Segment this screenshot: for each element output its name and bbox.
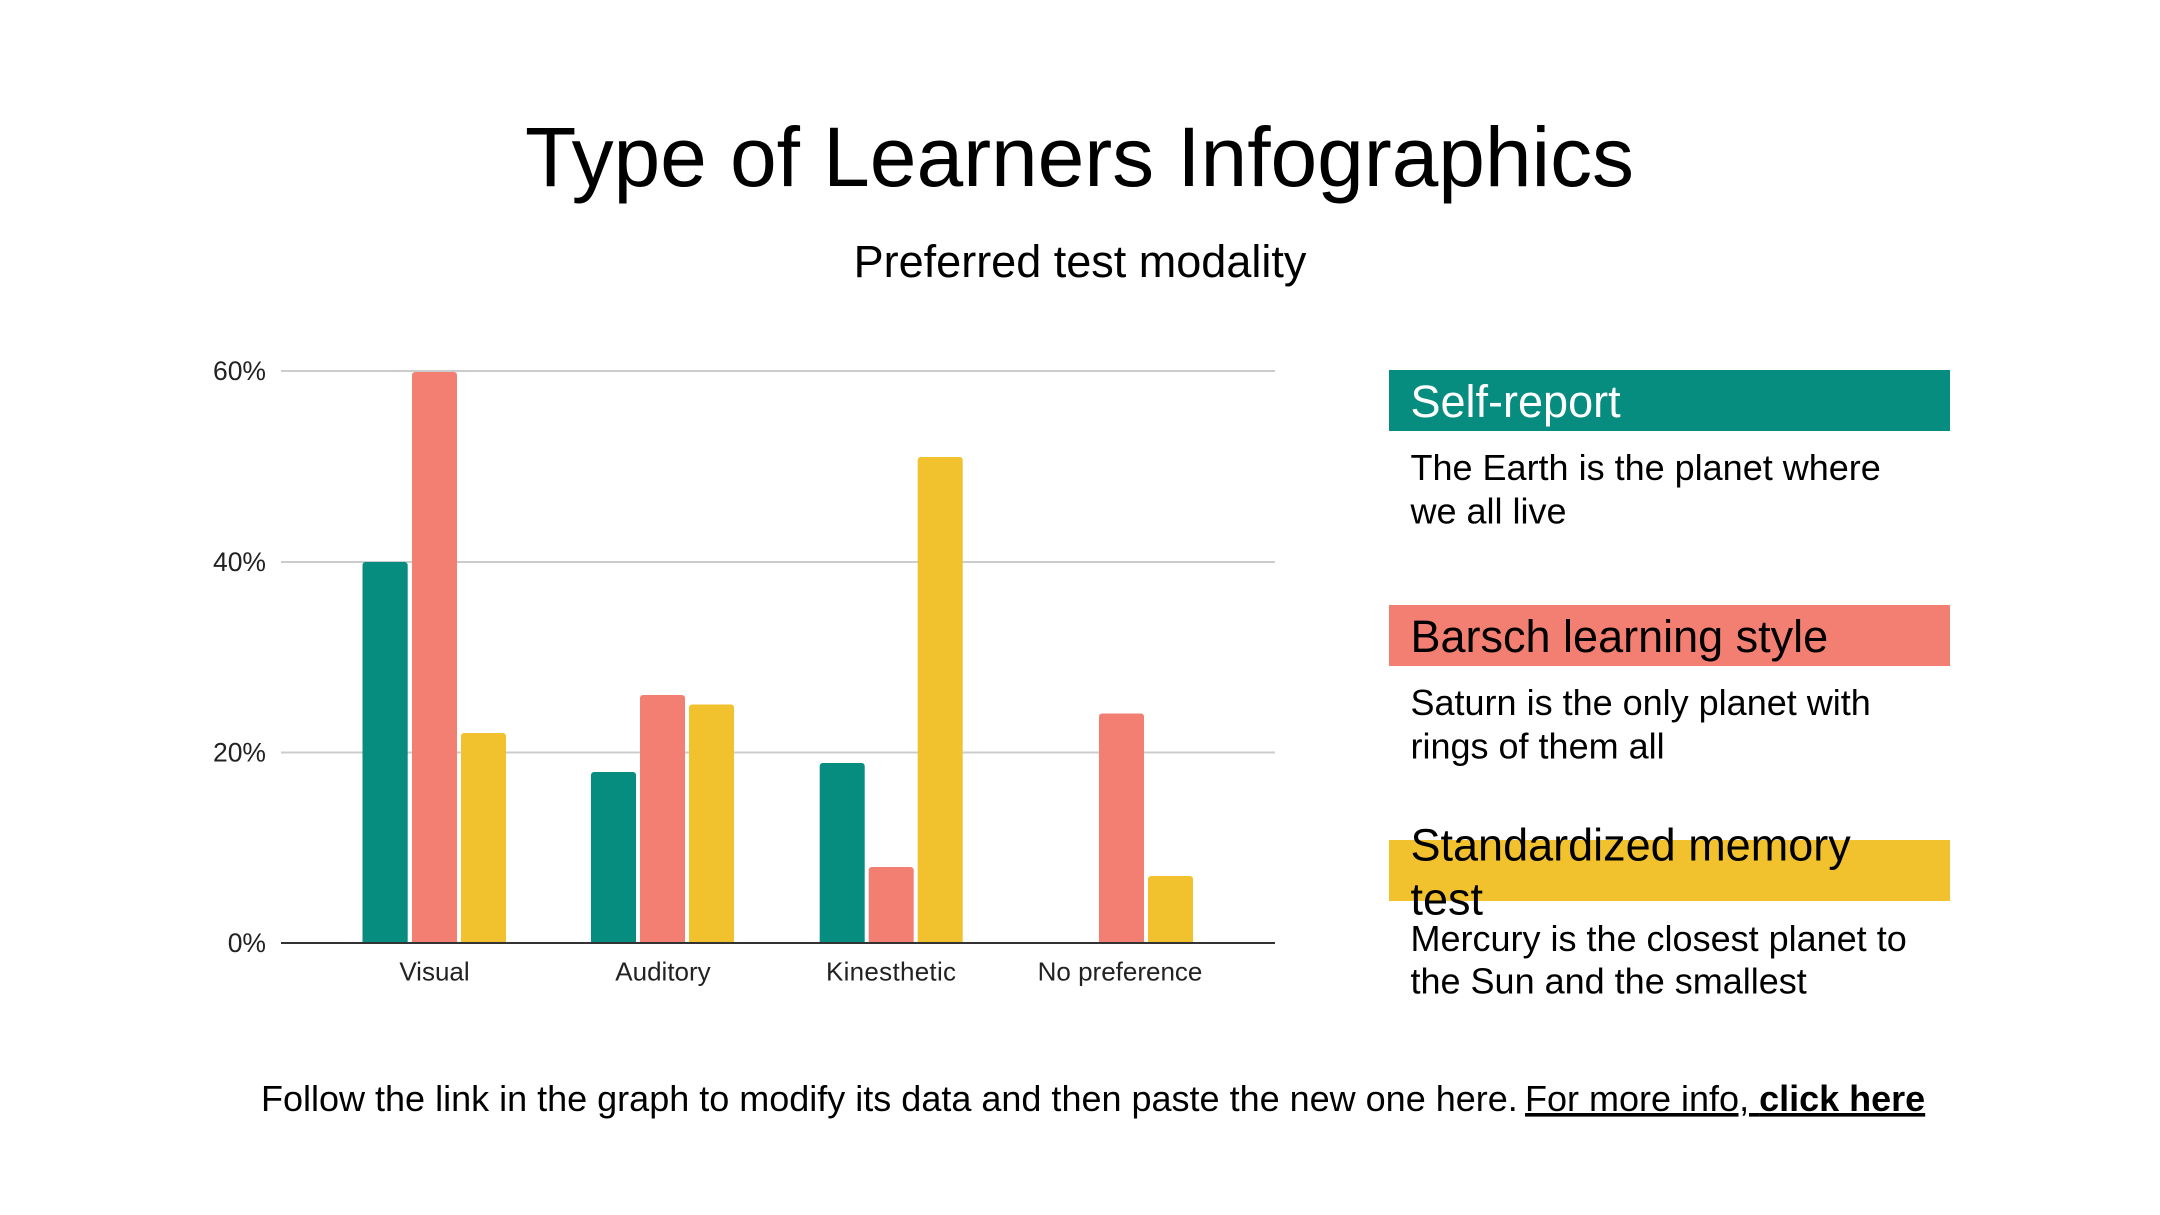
panel: Barsch learning style: Saturn is the only planet with xyxy=(1410,682,1871,723)
x-axis labels xyxy=(399,956,1202,986)
x-axis labels: No preference xyxy=(1038,956,1202,986)
panel: Self-report: we all live xyxy=(1410,490,1567,532)
panel: Self-report xyxy=(1389,370,1950,532)
y-axis labels: 20% xyxy=(213,738,266,768)
footer note: For more info, xyxy=(1525,1078,1759,1119)
title: Type of Learners Infographics xyxy=(525,110,1634,204)
x-axis labels: Kinesthetic xyxy=(826,956,956,986)
panel: Standardized memory test: test xyxy=(1410,874,1484,924)
panel: Barsch learning style xyxy=(1389,605,1950,766)
bar chart xyxy=(213,356,1275,986)
panel: Self-report: Self-report xyxy=(1410,376,1621,427)
bars: Visual xyxy=(362,372,506,943)
panel: Barsch learning style: rings of them all xyxy=(1410,726,1665,766)
subtitle: Preferred test modality xyxy=(854,236,1307,287)
y-axis labels: 60% xyxy=(213,356,266,386)
x-axis labels: Auditory xyxy=(615,956,711,986)
footer note: Follow the link in the graph to modify its data and then paste the new one here. xyxy=(261,1078,1518,1119)
panel: Standardized memory test xyxy=(1389,820,1950,1002)
panel: Barsch learning style: Barsch learning style xyxy=(1410,611,1828,662)
panel: Standardized memory test: the Sun and the smallest xyxy=(1410,960,1807,1002)
y-axis labels: 40% xyxy=(213,547,266,577)
panel: Standardized memory test: Mercury is the closest planet to xyxy=(1410,918,1907,959)
y-axis labels xyxy=(213,356,266,958)
y-axis labels: 0% xyxy=(228,928,266,958)
panel: Standardized memory test: Standardized memory xyxy=(1410,820,1851,870)
x-axis labels: Visual xyxy=(399,956,470,986)
bars: Kinesthetic xyxy=(820,457,963,943)
bars: No preference xyxy=(1099,714,1193,943)
bars: Auditory xyxy=(591,695,734,943)
footer note: click here xyxy=(1759,1078,1925,1119)
panel: Self-report: The Earth is the planet where xyxy=(1410,447,1881,488)
